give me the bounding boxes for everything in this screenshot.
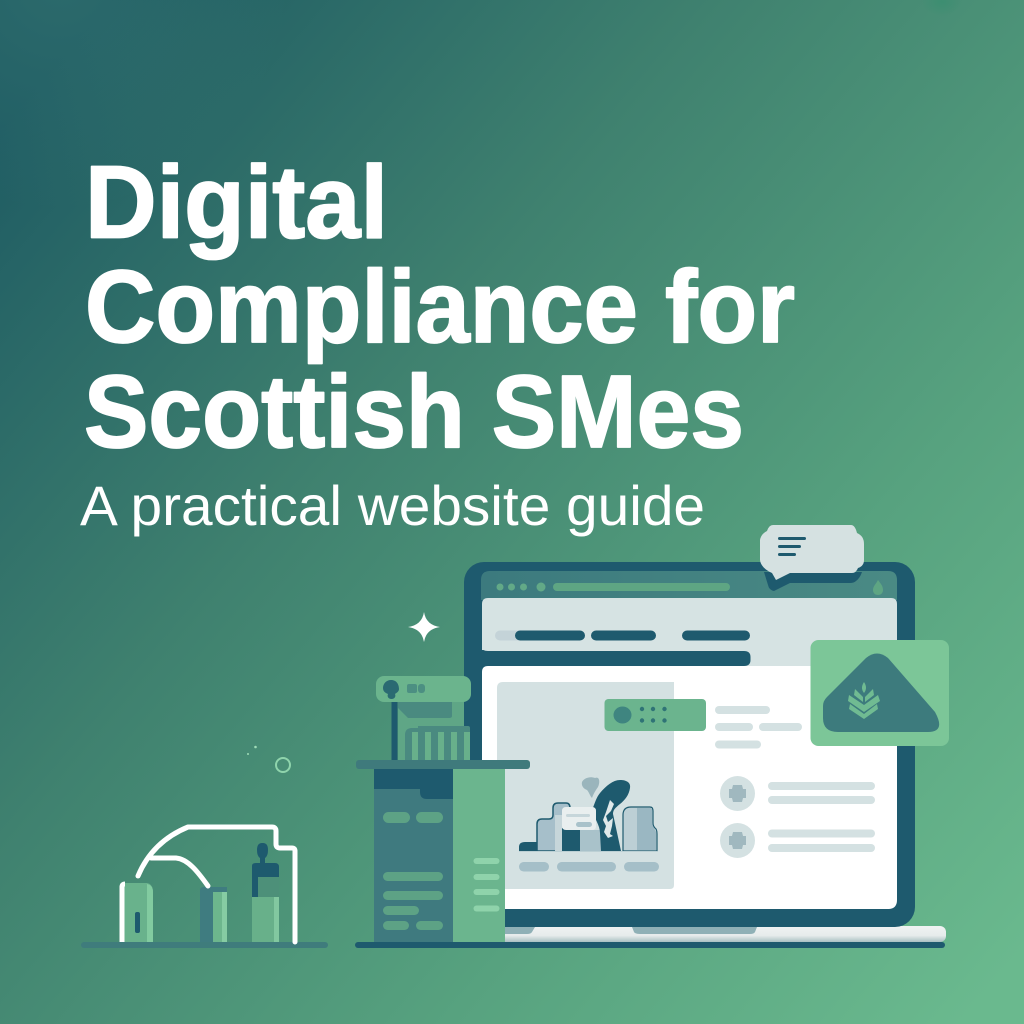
right bottle — [252, 843, 279, 942]
middle jar — [200, 887, 227, 942]
title: Digital — [85, 144, 388, 260]
speech bubble — [760, 525, 864, 591]
white outline — [122, 827, 295, 942]
floating badge — [810, 640, 949, 746]
nav panel — [482, 598, 897, 666]
icon: small dots and ring — [247, 746, 290, 772]
icon: flame — [873, 580, 883, 595]
laptop — [464, 562, 946, 942]
label card — [376, 676, 471, 702]
list item 2 — [720, 823, 875, 858]
text lines — [715, 706, 802, 748]
caption pills — [519, 862, 659, 872]
fence — [405, 726, 470, 761]
subtitle: A practical website guide — [80, 474, 705, 537]
browser header — [481, 571, 897, 600]
desk line — [355, 942, 945, 948]
white content area — [482, 666, 897, 909]
icon: leaf — [848, 682, 880, 719]
list item 1 — [720, 776, 875, 811]
hero image panel — [497, 682, 674, 889]
tower body dark — [374, 769, 453, 943]
tower pills — [383, 812, 443, 930]
back post and funnel — [392, 700, 464, 761]
shelf — [356, 760, 530, 769]
small scene — [519, 777, 658, 852]
tower green side — [453, 769, 505, 943]
left jar — [122, 883, 153, 942]
title: Compliance for — [85, 249, 795, 364]
left tower — [356, 676, 530, 943]
tower top — [374, 769, 453, 799]
dark bar — [464, 651, 750, 666]
laptop frame — [464, 562, 915, 927]
icon: sparkle — [408, 612, 440, 642]
green tag — [604, 699, 706, 731]
side marks — [474, 858, 500, 912]
left shelf line — [81, 942, 328, 948]
title — [84, 144, 795, 469]
laptop base — [490, 926, 946, 942]
left illustration: building outline and bottles — [81, 827, 328, 948]
title: Scottish SMes — [84, 354, 744, 469]
